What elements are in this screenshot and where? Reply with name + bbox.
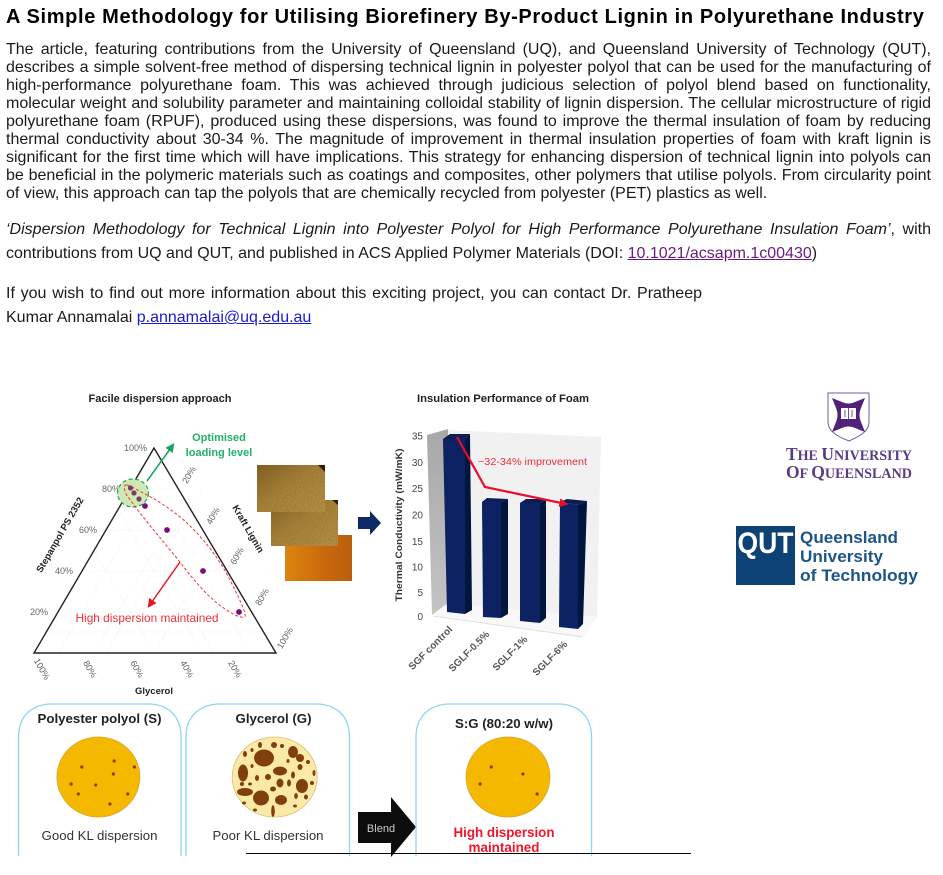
title: A Simple Methodology for Utilising Biorefinery By-Product Lignin in Polyurethane Industry (6, 6, 924, 28)
panel: blending schematic (18, 704, 592, 857)
y axis title: Thermal Conductivity (mW/mK) (394, 448, 405, 602)
y axis values: 35 (412, 432, 423, 442)
axis ticks: Glycerol: 20% (226, 659, 244, 679)
label: high dispersion maintained: High dispersion maintained (76, 611, 218, 625)
x axis labels: SGLF-0.5% (447, 629, 492, 674)
y axis values: 15 (412, 537, 423, 548)
text block: publication citation: ‘Dispersion Methodology for Technical Lignin into Polyester Polyol for High Performance Polyurethane Insulation Foam’, with (6, 221, 931, 238)
data points (128, 485, 242, 615)
card: glycerol: Poor KL dispersion (212, 828, 324, 843)
arrow: blend (358, 797, 416, 857)
y axis values: 0 (417, 612, 423, 623)
axis ticks: Kraft Lignin: 60% (228, 546, 246, 566)
icon: UQ shield (828, 393, 869, 441)
axis ticks: Glycerol (32, 657, 244, 681)
text block: article summary: polyurethane foam (RPUF), produced using these dispersions, was found to improve the thermal insulation of foam by reducing (6, 113, 931, 130)
axis label: Glycerol: Glycerol (135, 686, 173, 697)
chart: thermal conductivity bars (394, 429, 601, 679)
text block: article summary: significant for the first time which will have implications. This strategy for enhancing dispersion of technical lignin into polyols can (6, 149, 931, 166)
card: S:G blend: maintained (468, 840, 540, 855)
axis label: Stepanpol PS 2352: Stepanpol PS 2352 (34, 496, 86, 575)
panel: insulation performance of foam (394, 393, 601, 679)
text block: publication citation: contributions from UQ and QUT, and published in ACS Applied Polymer Materials (DOI: 10.1021/acsapm.1c00430) (6, 245, 817, 262)
x axis labels: SGLF-6% (531, 639, 570, 679)
axis ticks: Stepanpol: 100% (124, 443, 147, 453)
label: optimised loading level: loading level (186, 447, 252, 459)
text block: article summary: molecular weight and solubility parameter and maintaining colloidal stability of lignin dispersion. The cellular microstructure of rigid (6, 95, 931, 112)
axis ticks: Glycerol: 80% (81, 659, 99, 679)
highlight: optimised loading region (118, 479, 148, 507)
axis ticks: Glycerol: 60% (128, 659, 146, 679)
label: improvement: ~32-34% improvement (478, 456, 587, 468)
bar: SGLF-0.5% (482, 498, 508, 618)
y axis values: 20 (412, 510, 423, 522)
highlight: high dispersion region (124, 485, 245, 617)
y axis values: 10 (412, 562, 423, 574)
text block: article summary: high-performance polyurethane foam. This was achieved through judicious selection of polyol blend based on functionality, (6, 77, 931, 94)
text block: contact: If you wish to find out more information about this exciting project, you can contact Dr. Pratheep (6, 285, 702, 302)
x axis labels: SGF control (407, 624, 455, 673)
icon: high dispersion droplet (466, 737, 550, 817)
y axis values: 30 (412, 458, 423, 469)
text block: article summary: The article, featuring contributions from the University of Queensland (UQ), and Queensland University of Technology (QUT), (6, 41, 931, 58)
arrow: to insulation performance (358, 511, 381, 535)
text block: article summary: thermal conductivity about 30-34 %. The magnitude of improvement in thermal insulation properties of foam with kraft lignin is (6, 131, 931, 148)
y axis values (412, 432, 423, 623)
x axis labels: SGLF-1% (491, 634, 530, 674)
text block: contact (6, 285, 702, 326)
axis ticks: Kraft Lignin (180, 465, 295, 650)
text block: article summary (6, 41, 931, 202)
wordmark: UQ: THE UNIVERSITY (786, 444, 912, 464)
label: optimised loading level: Optimised (192, 432, 246, 444)
card: glycerol (186, 704, 350, 856)
text block: article summary: of view, this approach can tap the polyols that are chemically recycled from polyester (PET) plastics as well. (6, 185, 767, 202)
card: polyester polyol (18, 704, 181, 856)
text block: publication citation (6, 221, 931, 262)
arrow: optimised loading (147, 445, 173, 481)
heading: facile dispersion approach: Facile dispersion approach (88, 393, 232, 405)
icon: good dispersion droplet (57, 737, 140, 817)
text block: contact: Kumar Annamalai p.annamalai@uq.edu.au (6, 309, 311, 326)
QUT square (736, 526, 795, 585)
x axis labels (407, 624, 570, 679)
arrow: high dispersion (149, 562, 180, 606)
card: S:G blend: High dispersion (454, 825, 554, 840)
axis ticks: Stepanpol: 40% (55, 566, 73, 576)
axis ticks: Glycerol: 40% (178, 659, 196, 679)
y axis values: 5 (417, 588, 423, 599)
label: optimised loading level (186, 432, 252, 459)
panel: facile dispersion approach (30, 393, 381, 697)
wordmark: UQ (786, 444, 912, 482)
y axis values: 25 (412, 484, 423, 495)
arrow: improvement trend (457, 437, 566, 504)
axis ticks: Kraft Lignin: 20% (180, 465, 198, 485)
logo: Queensland University of Technology (736, 526, 919, 585)
micrographs (257, 465, 352, 581)
wordmark: UQ: OF QUEENSLAND (786, 462, 912, 482)
logo: The University of Queensland (786, 393, 912, 482)
axis ticks: Stepanpol: 20% (30, 607, 48, 617)
card: polyester polyol: Good KL dispersion (42, 828, 158, 843)
chart: ternary diagram (30, 432, 295, 697)
QUT wordmark: of Technology (800, 567, 919, 585)
bar: SGF control (443, 434, 472, 614)
axis ticks: Kraft Lignin: 100% (275, 626, 295, 650)
arrow: blend: Blend (367, 823, 395, 835)
QUT wordmark: Queensland (800, 529, 898, 547)
axis ticks: Kraft Lignin: 40% (204, 506, 222, 526)
axis ticks: Stepanpol: 80% (102, 484, 120, 494)
QUT wordmark (800, 529, 919, 585)
QUT letters: QUT (738, 527, 794, 560)
bar: SGLF-1% (520, 499, 546, 623)
heading: insulation performance: Insulation Performance of Foam (417, 393, 589, 405)
card: S:G blend: S:G (80:20 w/w) (455, 716, 553, 731)
bar: SGLF-6% (559, 499, 587, 629)
text block: article summary: be beneficial in the polymeric materials such as coatings and composites, other polymers that utilise polyols. From circularity point (6, 167, 931, 184)
axis ticks: Stepanpol: 60% (79, 525, 97, 535)
card: S:G blend (416, 704, 592, 856)
QUT wordmark: University (800, 548, 884, 566)
icon: poor dispersion droplet (232, 737, 317, 817)
axis ticks: Glycerol: 100% (32, 657, 52, 681)
axis label: Kraft Lignin: Kraft Lignin (229, 503, 266, 555)
card: glycerol: Glycerol (G) (236, 711, 312, 726)
axis ticks: Kraft Lignin: 80% (253, 587, 271, 607)
text block: article summary: describes a simple solvent-free method of dispersing technical lignin in polyester polyol that can be used for the manufacturing of (6, 59, 931, 76)
card: polyester polyol: Polyester polyol (S) (38, 711, 162, 726)
axis ticks: Stepanpol (30, 443, 147, 617)
